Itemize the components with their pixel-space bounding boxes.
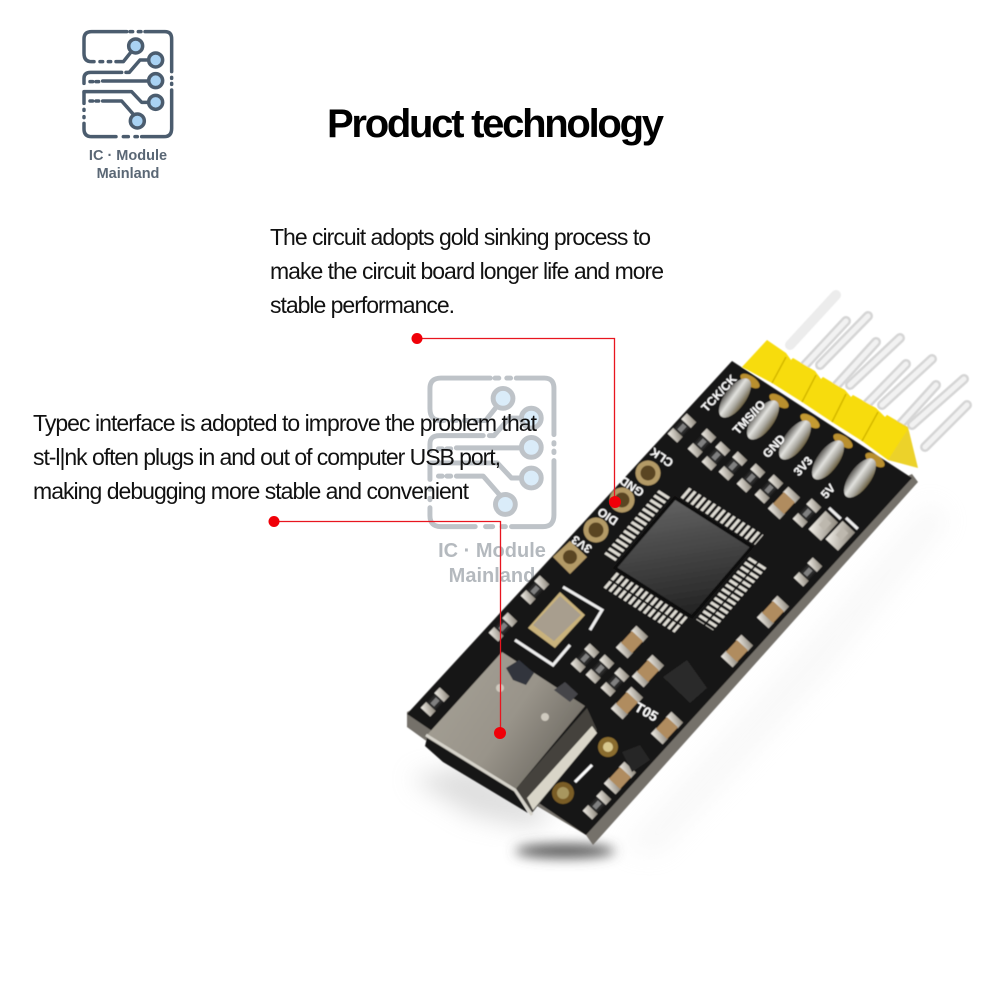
silkscreen labels: GND [760, 432, 789, 461]
silkscreen labels: CLK [647, 444, 676, 470]
silkscreen labels: GND [617, 473, 647, 500]
text: gold sinking process: The circuit adopts gold sinking process to [270, 224, 651, 250]
board edge [407, 474, 918, 845]
through-hole pads [553, 460, 660, 574]
board surface [407, 361, 912, 835]
silkscreen labels: TCK/CK [698, 372, 740, 415]
small SMD components [421, 413, 859, 820]
silkscreen labels: 5V [818, 481, 838, 501]
solder joints [713, 371, 887, 503]
board shadow [410, 500, 950, 858]
silkscreen labels: TMS/IO [730, 397, 768, 437]
silkscreen labels: 3V3 [569, 532, 595, 556]
text: Type-C interface: st-l|nk often plugs in and out of computer USB port, [33, 444, 501, 470]
text: Type-C interface [33, 410, 538, 504]
logo: IC Module Mainland [84, 32, 172, 182]
silkscreen labels [569, 372, 838, 725]
text: gold sinking process: stable performance. [270, 292, 455, 318]
callout line: gold sinking to pad [412, 333, 621, 508]
logo icon [84, 32, 172, 137]
silkscreen labels: 3V3 [791, 453, 816, 479]
text: Type-C interface: Typec interface is adopted to improve the problem that [33, 410, 538, 436]
title: Product technology [327, 102, 665, 146]
text: gold sinking process: make the circuit board longer life and more [270, 258, 664, 284]
callout line: Type-C to USB connector [268, 516, 506, 739]
microcontroller chip [597, 484, 771, 635]
USB-C connector [425, 652, 618, 815]
watermark logo [430, 378, 554, 587]
product photo: debugger board [407, 295, 967, 858]
header pins [790, 295, 967, 447]
silkscreen labels: DIO [595, 505, 621, 528]
watermark logo: Mainland [449, 565, 535, 587]
watermark logo: IC · Module [438, 540, 546, 562]
silkscreen labels: T05 [632, 699, 661, 725]
crystal oscillator [515, 587, 602, 665]
logo: IC Module Mainland: Mainland [97, 166, 159, 182]
logo wordmark: IC · Module [89, 148, 167, 164]
text: Type-C interface: making debugging more stable and convenient [33, 478, 470, 504]
yellow pin header [742, 340, 918, 468]
text: gold sinking process [270, 224, 664, 318]
